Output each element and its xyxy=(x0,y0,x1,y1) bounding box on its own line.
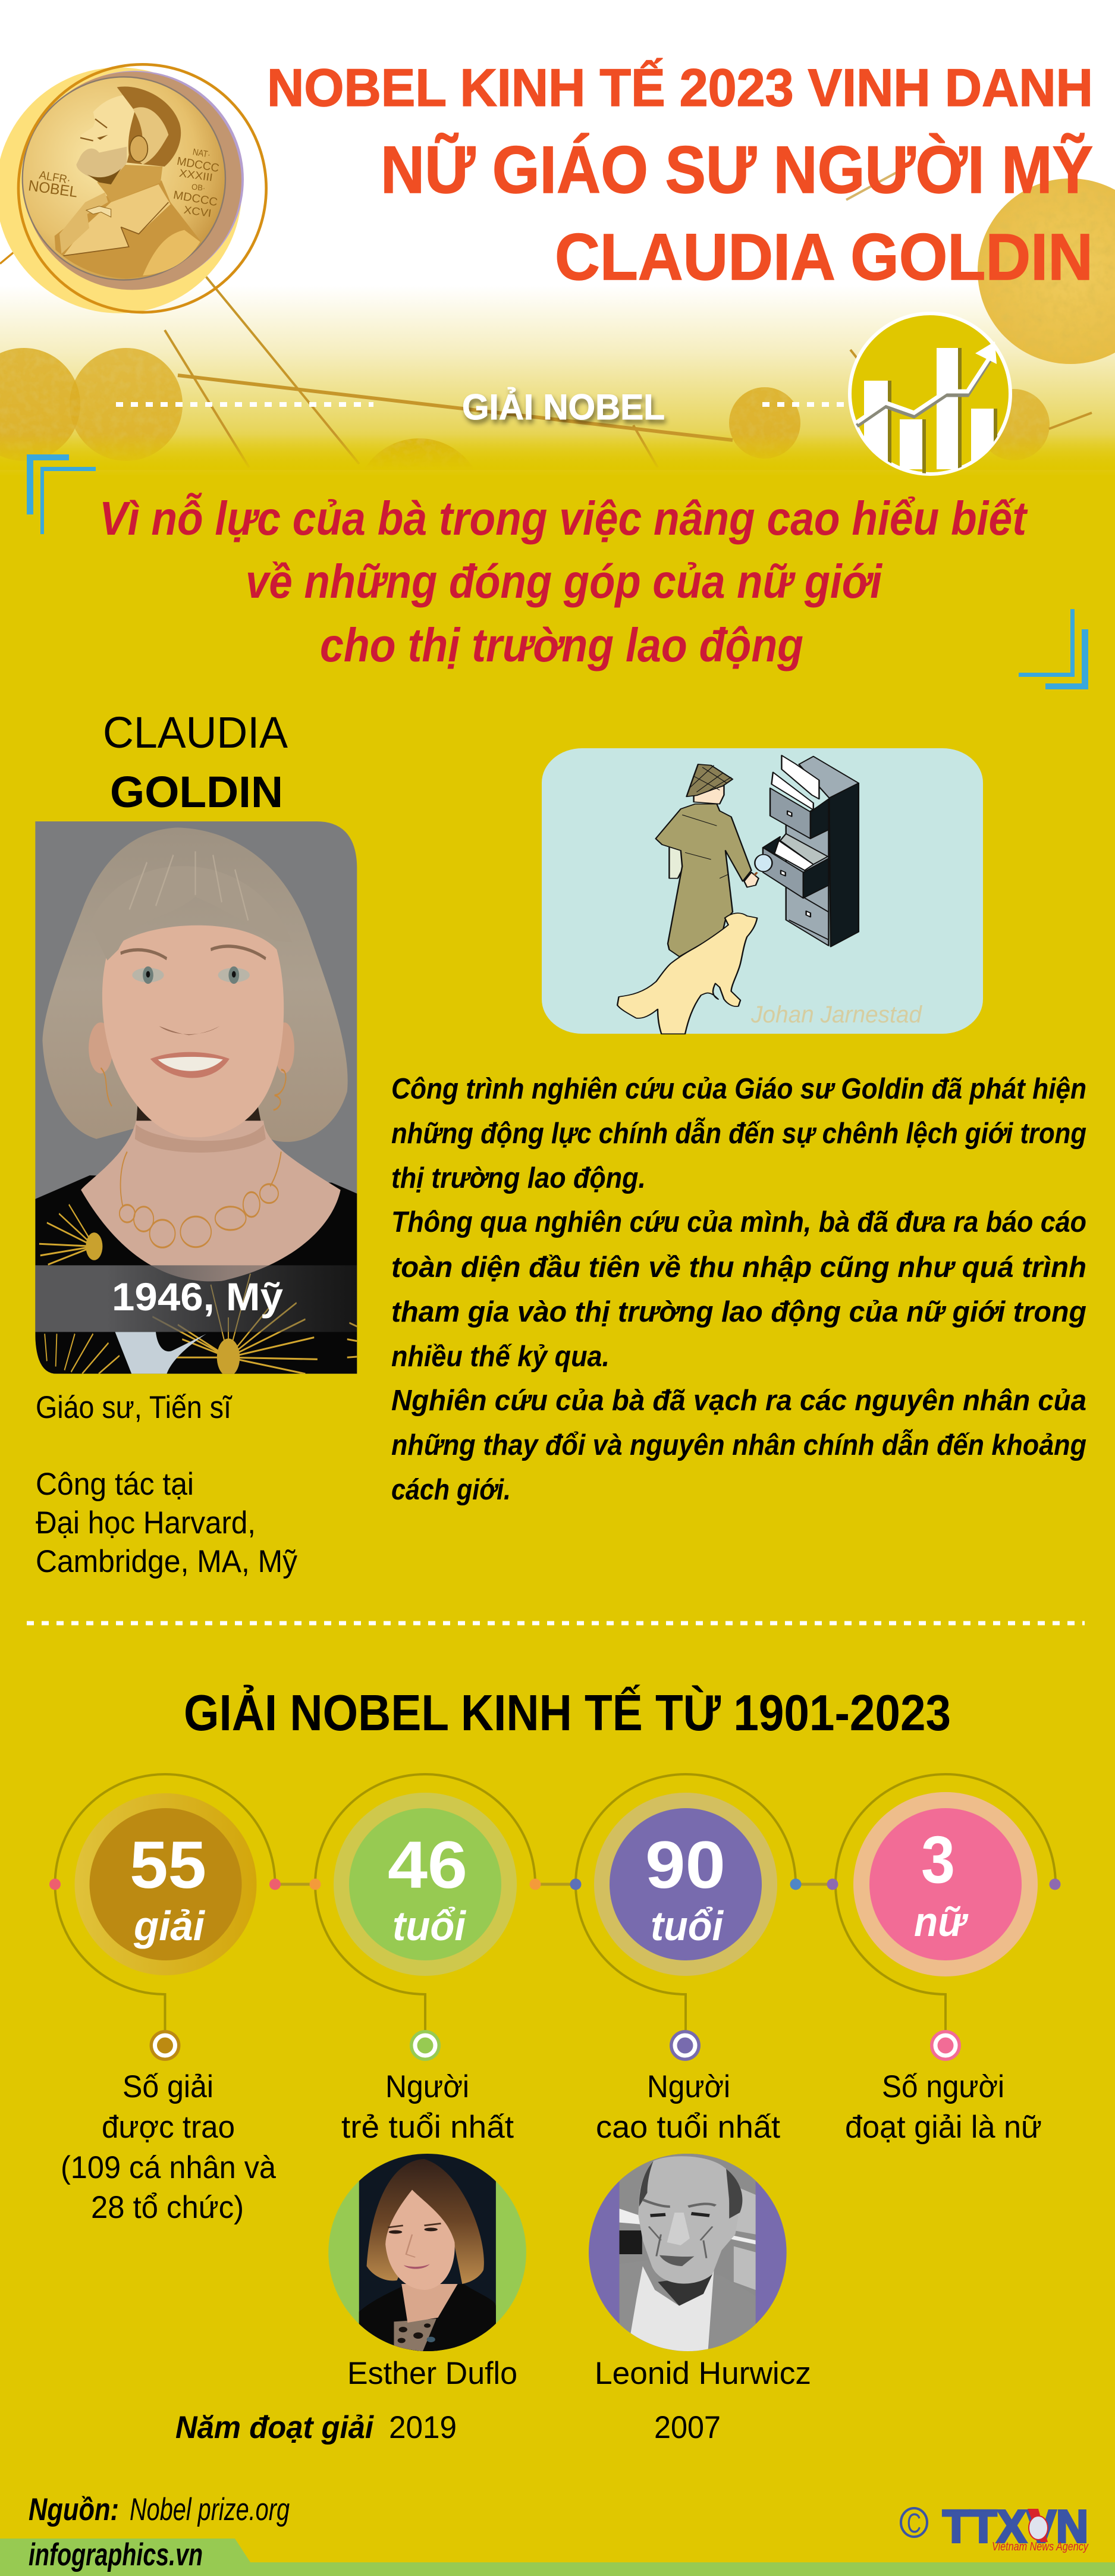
source xyxy=(29,2492,290,2527)
labels under stats: trẻ tuổi nhất xyxy=(341,2110,514,2145)
stat: 3 women: 3 xyxy=(921,1822,955,1897)
text block: profile details xyxy=(36,1390,297,1579)
names of laureates xyxy=(347,2356,811,2391)
stat: youngest 46 xyxy=(309,1774,541,2061)
medal: Nobel gold medal: OB· xyxy=(191,182,206,193)
section heading: GIẢI NOBEL KINH TẾ TỪ 1901-2023 xyxy=(184,1684,951,1742)
stat: 3 women: nữ xyxy=(914,1899,969,1945)
labels under stats: Người xyxy=(385,2069,469,2104)
text block: profile details: Đại học Harvard, xyxy=(36,1505,256,1540)
medal: Nobel gold medal: NAT· xyxy=(192,147,211,160)
labels under stats: Số giải xyxy=(123,2069,213,2104)
text block: research summary: toàn diện đầu tiên về thu nhập cũng như quá trình xyxy=(391,1251,1086,1284)
text block: research summary xyxy=(391,1073,1086,1506)
corner bracket bottom right xyxy=(1019,609,1088,689)
name heading: CLAUDIA xyxy=(103,708,288,757)
medal: Nobel gold medal: XXXIII xyxy=(178,167,213,184)
text block: research summary: nhiều thế kỷ qua. xyxy=(391,1341,610,1373)
text block: research summary: cách giới. xyxy=(391,1474,511,1506)
quote xyxy=(99,492,1028,672)
quote: về những đóng góp của nữ giới xyxy=(246,555,883,608)
medal: Nobel gold medal: MDCCC xyxy=(172,189,218,209)
portrait: Esther Duflo xyxy=(328,2154,526,2351)
medal: Nobel gold medal: MDCCC xyxy=(176,155,220,175)
name heading xyxy=(103,708,288,817)
stat: oldest 90: tuổi xyxy=(651,1903,724,1949)
stat: 55 prizes xyxy=(49,1774,281,2061)
labels under stats: cao tuổi nhất xyxy=(596,2110,780,2145)
text block: research summary: tham gia vào thị trường lao động của nữ giới trong xyxy=(391,1296,1086,1328)
source: Nobel prize.org xyxy=(130,2492,290,2527)
award years: Năm đoạt giải xyxy=(175,2410,374,2445)
icon: rising bar chart xyxy=(850,313,1010,482)
medal: Nobel gold medal: XCVI xyxy=(183,203,212,219)
portrait: Leonid Hurwicz xyxy=(589,2154,787,2351)
quote: cho thị trường lao động xyxy=(320,619,803,672)
names of laureates: Leonid Hurwicz xyxy=(595,2356,811,2391)
stat: youngest 46: 46 xyxy=(388,1828,467,1902)
labels under stats xyxy=(61,2069,1042,2225)
labels under stats: được trao xyxy=(102,2110,235,2145)
quote: Vì nỗ lực của bà trong việc nâng cao hiểu biết xyxy=(99,492,1028,545)
text block: research summary: Nghiên cứu của bà đã vạch ra các nguyên nhân của xyxy=(391,1385,1086,1417)
stat: oldest 90: 90 xyxy=(645,1828,725,1902)
name heading: GOLDIN xyxy=(110,767,283,817)
illustration: detective and filing cabinet: Johan Jarnestad xyxy=(750,1002,923,1028)
labels under stats: Người xyxy=(647,2069,730,2104)
title xyxy=(267,58,1093,294)
portrait: Claudia Goldin: 1946, Mỹ xyxy=(112,1275,283,1319)
portrait: Claudia Goldin xyxy=(24,815,369,1386)
text block: profile details: Cambridge, MA, Mỹ xyxy=(36,1544,297,1579)
text block: profile details: Công tác tại xyxy=(36,1467,194,1502)
footer band: infographics.vn xyxy=(29,2537,203,2572)
logo: TTXVN: Vietnam News Agency xyxy=(992,2540,1089,2553)
stat: oldest 90 xyxy=(570,1774,802,2061)
source: Nguồn: xyxy=(29,2492,119,2527)
award years: 2019 xyxy=(389,2410,457,2445)
footer band xyxy=(0,2537,1115,2576)
connectors between stat rings xyxy=(275,1883,836,1885)
logo: TTXVN: TTXVN xyxy=(943,2501,1088,2552)
labels under stats: đoạt giải là nữ xyxy=(845,2110,1042,2145)
title: NOBEL KINH TẾ 2023 VINH DANH xyxy=(267,58,1093,117)
hero decoration: gold discs and lines xyxy=(0,171,1115,567)
labels under stats: (109 cá nhân và xyxy=(61,2150,276,2185)
medal: Nobel gold medal xyxy=(0,63,268,314)
award years xyxy=(175,2410,721,2445)
stat: 55 prizes: giải xyxy=(133,1903,206,1949)
heading: giải Nobel: GIẢI NOBEL xyxy=(462,387,665,427)
logo: TTXVN: C xyxy=(907,2508,921,2539)
illustration: detective and filing cabinet xyxy=(542,748,983,1034)
title: CLAUDIA GOLDIN xyxy=(555,221,1093,294)
divider: hero dots xyxy=(116,402,850,407)
names of laureates: Esther Duflo xyxy=(347,2356,517,2391)
text block: research summary: thị trường lao động. xyxy=(391,1162,646,1194)
medal: Nobel gold medal: NOBEL xyxy=(27,177,78,201)
labels under stats: 28 tổ chức) xyxy=(91,2190,244,2225)
medal: Nobel gold medal: ALFR· xyxy=(38,169,71,187)
text block: profile details: Giáo sư, Tiến sĩ xyxy=(36,1390,233,1425)
stat: 55 prizes: 55 xyxy=(130,1828,206,1902)
labels under stats: Số người xyxy=(882,2069,1004,2104)
stat: youngest 46: tuổi xyxy=(392,1903,466,1949)
stat: 3 women xyxy=(827,1774,1061,2061)
award years: 2007 xyxy=(654,2410,721,2445)
corner bracket top left xyxy=(27,454,96,534)
